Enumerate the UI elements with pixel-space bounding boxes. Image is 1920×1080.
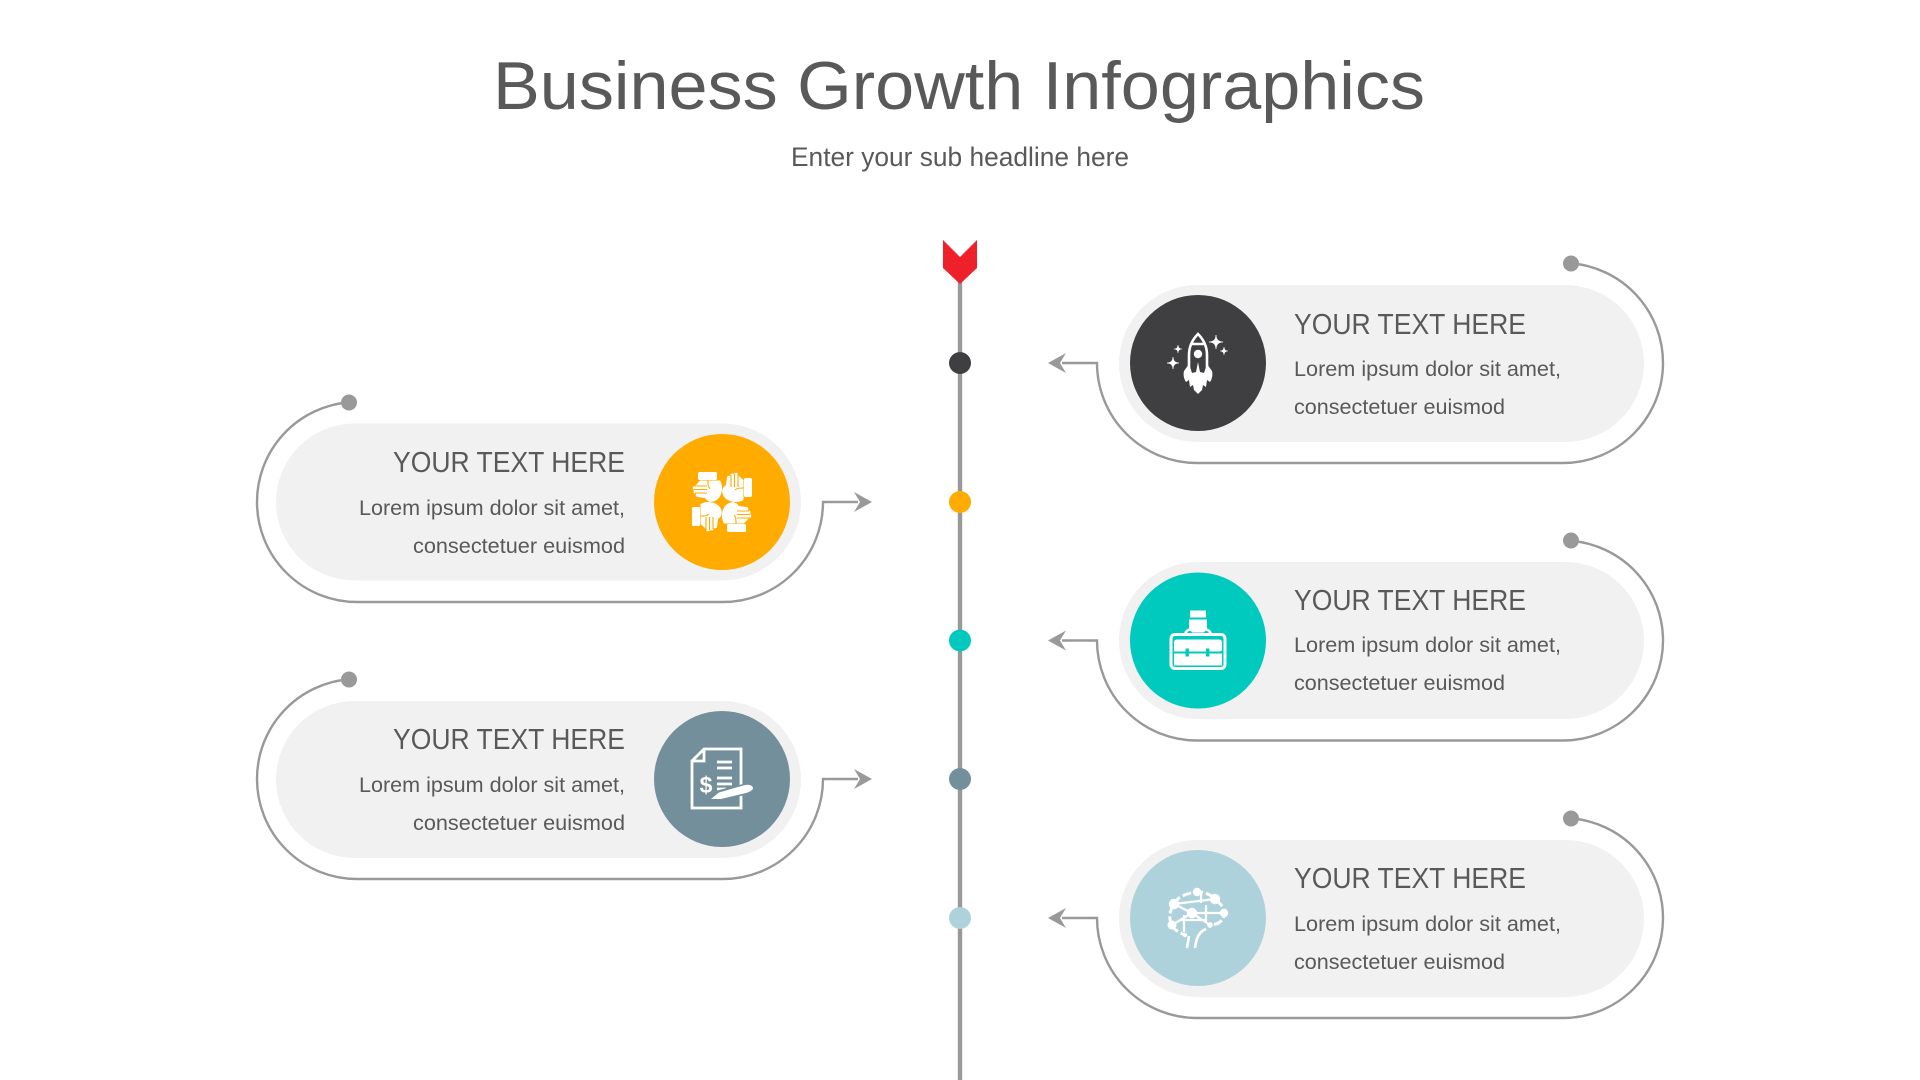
arrow head [1048, 353, 1066, 373]
icon: four hands [692, 472, 752, 532]
connector line [1062, 263, 1663, 463]
connector end dot [341, 394, 357, 410]
card heading: YOUR TEXT HERE [393, 724, 625, 756]
icon circle [654, 434, 790, 570]
timeline dot 2 [949, 491, 971, 513]
card body text [359, 774, 625, 835]
card body text: consectetuer euismod [1294, 672, 1505, 695]
card pill [276, 424, 801, 580]
card body text: consectetuer euismod [1294, 951, 1505, 974]
card heading: YOUR TEXT HERE [1294, 309, 1526, 341]
subtitle: Enter your sub headline here [791, 142, 1129, 172]
timeline spine [958, 270, 962, 1080]
card body text: consectetuer euismod [413, 535, 625, 558]
card body text: Lorem ipsum dolor sit amet, [359, 497, 625, 520]
icon: document with pen [692, 749, 753, 808]
card pill [1119, 285, 1644, 442]
card heading: YOUR TEXT HERE [1294, 863, 1526, 895]
icon circle [1130, 295, 1266, 431]
connector line [257, 679, 858, 879]
card pill [1119, 562, 1644, 719]
card body text: consectetuer euismod [413, 812, 625, 835]
icon circle [1130, 572, 1266, 708]
icon: document with pen: $ [700, 772, 713, 798]
card body text [1294, 358, 1561, 419]
card heading: YOUR TEXT HERE [1294, 585, 1526, 617]
timeline dot 4 [949, 768, 971, 790]
timeline dot 3 [949, 630, 971, 652]
icon: red chevron marker [943, 240, 977, 284]
connector end dot [341, 672, 357, 688]
timeline dot 1 [949, 352, 971, 374]
card body text [1294, 634, 1561, 695]
connector end dot [1563, 532, 1579, 548]
card body text: Lorem ipsum dolor sit amet, [1294, 634, 1561, 657]
central timeline [943, 240, 977, 1080]
icon: rocket [1167, 334, 1228, 394]
card body text [359, 497, 625, 558]
card body text: Lorem ipsum dolor sit amet, [1294, 913, 1561, 936]
card pill [276, 701, 801, 858]
connector line [1062, 541, 1663, 740]
card body text: consectetuer euismod [1294, 396, 1505, 419]
connector line [257, 402, 858, 602]
card pill [1119, 840, 1644, 997]
timeline dot 5 [949, 907, 971, 929]
icon: network brain [1168, 888, 1228, 948]
connector line [1062, 818, 1663, 1018]
icon circle [654, 711, 790, 847]
icon: hand holding briefcase [1171, 610, 1225, 668]
connector end dot [1563, 810, 1579, 826]
arrow head [1048, 630, 1066, 650]
panel: right card 3 briefcase [1048, 532, 1663, 740]
panel: left card 2 teamwork [257, 394, 872, 602]
card heading: YOUR TEXT HERE [393, 447, 625, 479]
panel: right card 1 rocket [1048, 256, 1663, 463]
card body text: Lorem ipsum dolor sit amet, [359, 774, 625, 797]
arrow head [854, 769, 872, 789]
arrow head [854, 492, 872, 512]
panel: right card 5 brain [1048, 810, 1663, 1018]
card body text: Lorem ipsum dolor sit amet, [1294, 358, 1561, 381]
icon circle [1130, 850, 1266, 986]
panel: left card 4 financial document [257, 672, 872, 879]
arrow head [1048, 908, 1066, 928]
title: Business Growth Infographics [493, 48, 1425, 124]
card body text [1294, 913, 1561, 974]
connector end dot [1563, 256, 1579, 272]
